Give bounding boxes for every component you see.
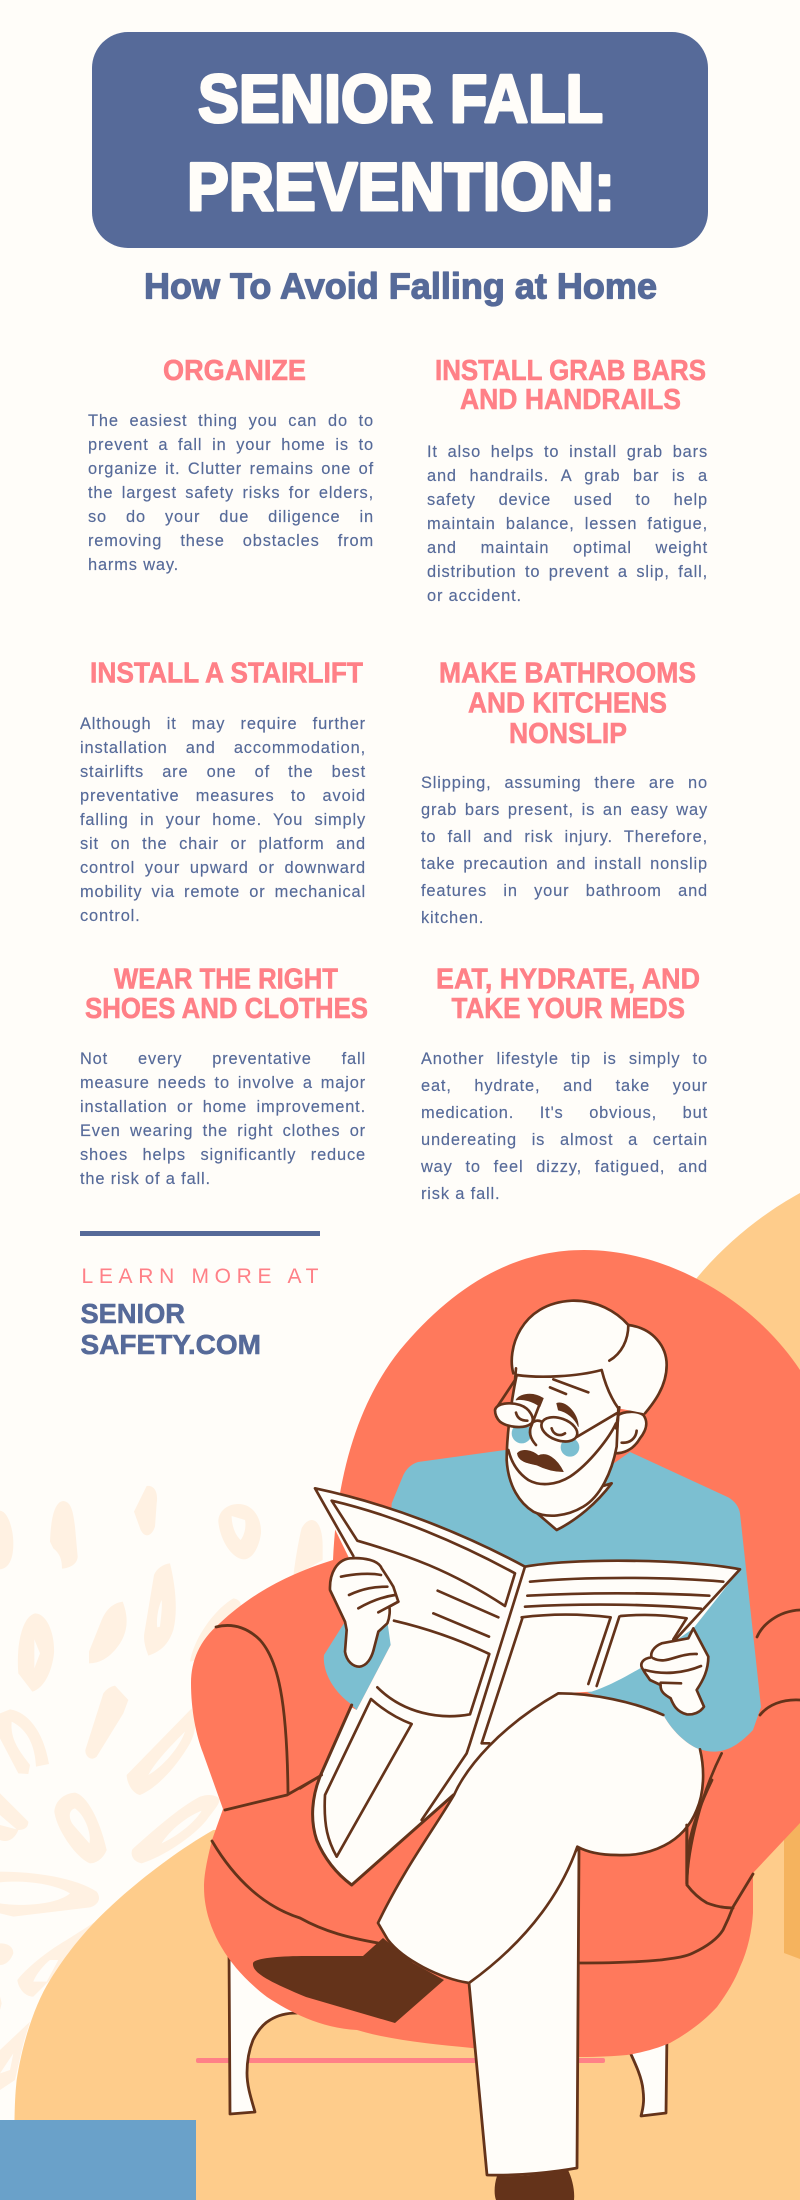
text: nonslip: kitchen. xyxy=(421,909,484,927)
right hand fingers xyxy=(645,1654,701,1683)
hair fill xyxy=(512,1301,667,1413)
text: eat and hydrate: medication. It's obvious, but xyxy=(421,1104,708,1122)
learn more text and website xyxy=(80,1265,319,1360)
background pattern upper xyxy=(0,1486,323,1795)
pink floor bar xyxy=(196,2058,605,2063)
crossed leg fill xyxy=(378,1693,703,1983)
right lens xyxy=(538,1413,581,1446)
beard inner line xyxy=(508,1423,616,1484)
left hand fingers xyxy=(341,1574,398,1612)
text: eat and hydrate: eat, hydrate, and take your xyxy=(421,1076,708,1094)
text: stairlift: sit on the chair or platform and xyxy=(80,835,366,853)
heading: nonslip: NONSLIP xyxy=(509,718,627,750)
hair part line xyxy=(609,1325,628,1361)
text: stairlift: Although it may require further xyxy=(80,715,366,733)
ear xyxy=(615,1412,646,1453)
man head xyxy=(495,1301,667,1530)
text: eat and hydrate: risk a fall. xyxy=(421,1184,500,1202)
text: organize xyxy=(88,412,374,574)
newspaper left page fill xyxy=(313,1488,525,1885)
left inner slip xyxy=(325,1699,412,1857)
text: grab bars: safety device used to help xyxy=(427,490,708,508)
text: eat and hydrate: Another lifestyle tip is simply to xyxy=(421,1050,708,1068)
text: nonslip: features in your bathroom and xyxy=(421,882,708,900)
heading: eat and hydrate: EAT, HYDRATE, AND xyxy=(436,964,700,996)
panel: stairlift xyxy=(80,658,366,925)
heading: eat and hydrate xyxy=(436,964,700,1025)
text: shoes and clothes: installation or home improvement. xyxy=(80,1098,366,1116)
left lens xyxy=(495,1403,533,1427)
panel: nonslip xyxy=(421,658,708,927)
learn more text and website: SENIOR xyxy=(80,1298,185,1329)
heading: shoes and clothes: WEAR THE RIGHT xyxy=(114,964,338,996)
eyes xyxy=(516,1413,565,1435)
text: grab bars: distribution to prevent a slip, fall, xyxy=(427,562,708,580)
blush left xyxy=(512,1423,532,1443)
rule xyxy=(80,1231,320,1236)
text: stairlift: preventative measures to avoid xyxy=(80,787,366,805)
chair outlines xyxy=(212,1610,800,1963)
text: grab bars: and maintain optimal weight xyxy=(427,538,708,556)
dark orange block at right edge xyxy=(784,1815,800,1959)
text: stairlift xyxy=(80,715,366,925)
glasses temple xyxy=(497,1368,516,1407)
left hand xyxy=(330,1558,398,1667)
panel: grab bars xyxy=(427,355,708,604)
heading: nonslip: AND KITCHENS xyxy=(468,688,667,720)
text: eat and hydrate xyxy=(420,1050,708,1202)
left page text lines xyxy=(433,1591,498,1637)
text: nonslip: to fall and risk injury. Therefore, xyxy=(421,828,708,846)
text: stairlift: installation and accommodation, xyxy=(80,739,366,757)
heading: nonslip: MAKE BATHROOMS xyxy=(439,658,696,690)
background pattern lower xyxy=(0,1793,219,2090)
text: organize: organize it. Clutter remains one of xyxy=(88,460,374,478)
learn more text and website: SAFETY.COM xyxy=(80,1329,261,1360)
text: organize: the largest safety risks for elders, xyxy=(88,484,374,502)
heading: shoes and clothes xyxy=(85,964,368,1025)
title line two: PREVENTION: xyxy=(187,149,615,225)
left lower flap xyxy=(377,1621,489,1716)
text: eat and hydrate: undereating is almost a certain xyxy=(421,1130,708,1148)
text: nonslip: grab bars present, is an easy way xyxy=(421,801,708,819)
heading: grab bars xyxy=(435,355,706,416)
text: stairlift: stairlifts are one of the best xyxy=(80,763,366,781)
heading: stairlift: INSTALL A STAIRLIFT xyxy=(90,658,363,690)
nose xyxy=(530,1405,539,1445)
text: shoes and clothes: Not every preventative fall xyxy=(80,1050,366,1068)
text: grab bars: or accident. xyxy=(427,586,522,604)
text: nonslip xyxy=(421,774,708,927)
newspaper outer outline xyxy=(315,1488,740,1640)
face and beard xyxy=(507,1370,618,1516)
neck tip xyxy=(533,1483,612,1530)
text: shoes and clothes: Even wearing the right clothes or xyxy=(80,1122,366,1140)
text: grab bars: and handrails. A grab bar is a xyxy=(427,466,708,484)
title box xyxy=(92,32,708,248)
right page text lines xyxy=(525,1578,723,1609)
text: shoes and clothes xyxy=(80,1050,366,1188)
subtitle: How To Avoid Falling at Home xyxy=(144,266,657,306)
chair lines beside sleeve xyxy=(300,1753,722,1883)
rear orange blob xyxy=(680,1193,800,1900)
text: organize: harms way. xyxy=(88,556,179,574)
chair legs xyxy=(229,1950,667,2116)
newspaper right page fill xyxy=(420,1561,740,1823)
text: stairlift: control. xyxy=(80,907,141,925)
heading: grab bars: AND HANDRAILS xyxy=(460,384,681,416)
panel: eat and hydrate xyxy=(420,964,708,1202)
newspaper, crossed leg and hands xyxy=(300,1488,740,1983)
text: stairlift: mobility via remote or mechanical xyxy=(80,883,366,901)
heading: organize: ORGANIZE xyxy=(163,355,306,387)
left chair leg xyxy=(229,1950,300,2114)
learn more text and website: LEARN MORE AT xyxy=(82,1265,319,1288)
text: shoes and clothes: shoes helps significantly reduce xyxy=(80,1146,366,1164)
heading: eat and hydrate: TAKE YOUR MEDS xyxy=(452,993,685,1025)
glasses arm xyxy=(532,1407,619,1437)
standing foot shoe xyxy=(495,2170,574,2200)
text: nonslip: take precaution and install nonslip xyxy=(421,855,708,873)
right hand xyxy=(641,1628,708,1714)
text: stairlift: control your upward or downward xyxy=(80,859,366,877)
text: grab bars: It also helps to install grab bars xyxy=(427,442,708,460)
heading: grab bars: INSTALL GRAB BARS xyxy=(435,355,706,387)
right chair leg xyxy=(629,2030,667,2116)
text: shoes and clothes: measure needs to involve a major xyxy=(80,1074,366,1092)
text: nonslip: Slipping, assuming there are no xyxy=(421,774,708,792)
heading: nonslip xyxy=(439,658,696,750)
text: stairlift: falling in your home. You simply xyxy=(80,811,366,829)
text: organize: removing these obstacles from xyxy=(88,532,374,550)
bottom left blue rectangle xyxy=(0,2120,196,2200)
standing leg xyxy=(469,1847,579,2175)
text: organize: The easiest thing you can do to xyxy=(88,412,374,430)
armchair body xyxy=(191,1250,800,2057)
left page outer edge xyxy=(313,1705,453,1885)
shirt xyxy=(324,1450,761,1752)
text: organize: so do your due diligence in xyxy=(88,508,374,526)
title line one: SENIOR FALL xyxy=(198,61,603,137)
text: shoes and clothes: the risk of a fall. xyxy=(80,1170,211,1188)
text: grab bars xyxy=(427,442,708,604)
text: eat and hydrate: way to feel dizzy, fatigued, and xyxy=(421,1158,708,1176)
crossed leg shoe xyxy=(253,1938,444,2023)
right page columns xyxy=(482,1615,687,1743)
centre fold xyxy=(422,1567,525,1820)
orange floor shape xyxy=(14,1797,800,2200)
eyebrows xyxy=(516,1394,578,1427)
blush right xyxy=(561,1438,579,1457)
crossed leg outline xyxy=(378,1693,703,1983)
heading: shoes and clothes: SHOES AND CLOTHES xyxy=(85,993,368,1025)
hair outline xyxy=(512,1301,667,1413)
text: organize: prevent a fall in your home is to xyxy=(88,436,374,454)
text: grab bars: maintain balance, lessen fatigue, xyxy=(427,514,708,532)
inner panel on left page xyxy=(332,1501,515,1606)
panel: shoes and clothes xyxy=(80,964,368,1188)
moustache xyxy=(517,1450,563,1472)
forehead lines xyxy=(550,1379,588,1394)
panel: learn more xyxy=(80,1231,320,1360)
panel: organize xyxy=(88,355,374,574)
